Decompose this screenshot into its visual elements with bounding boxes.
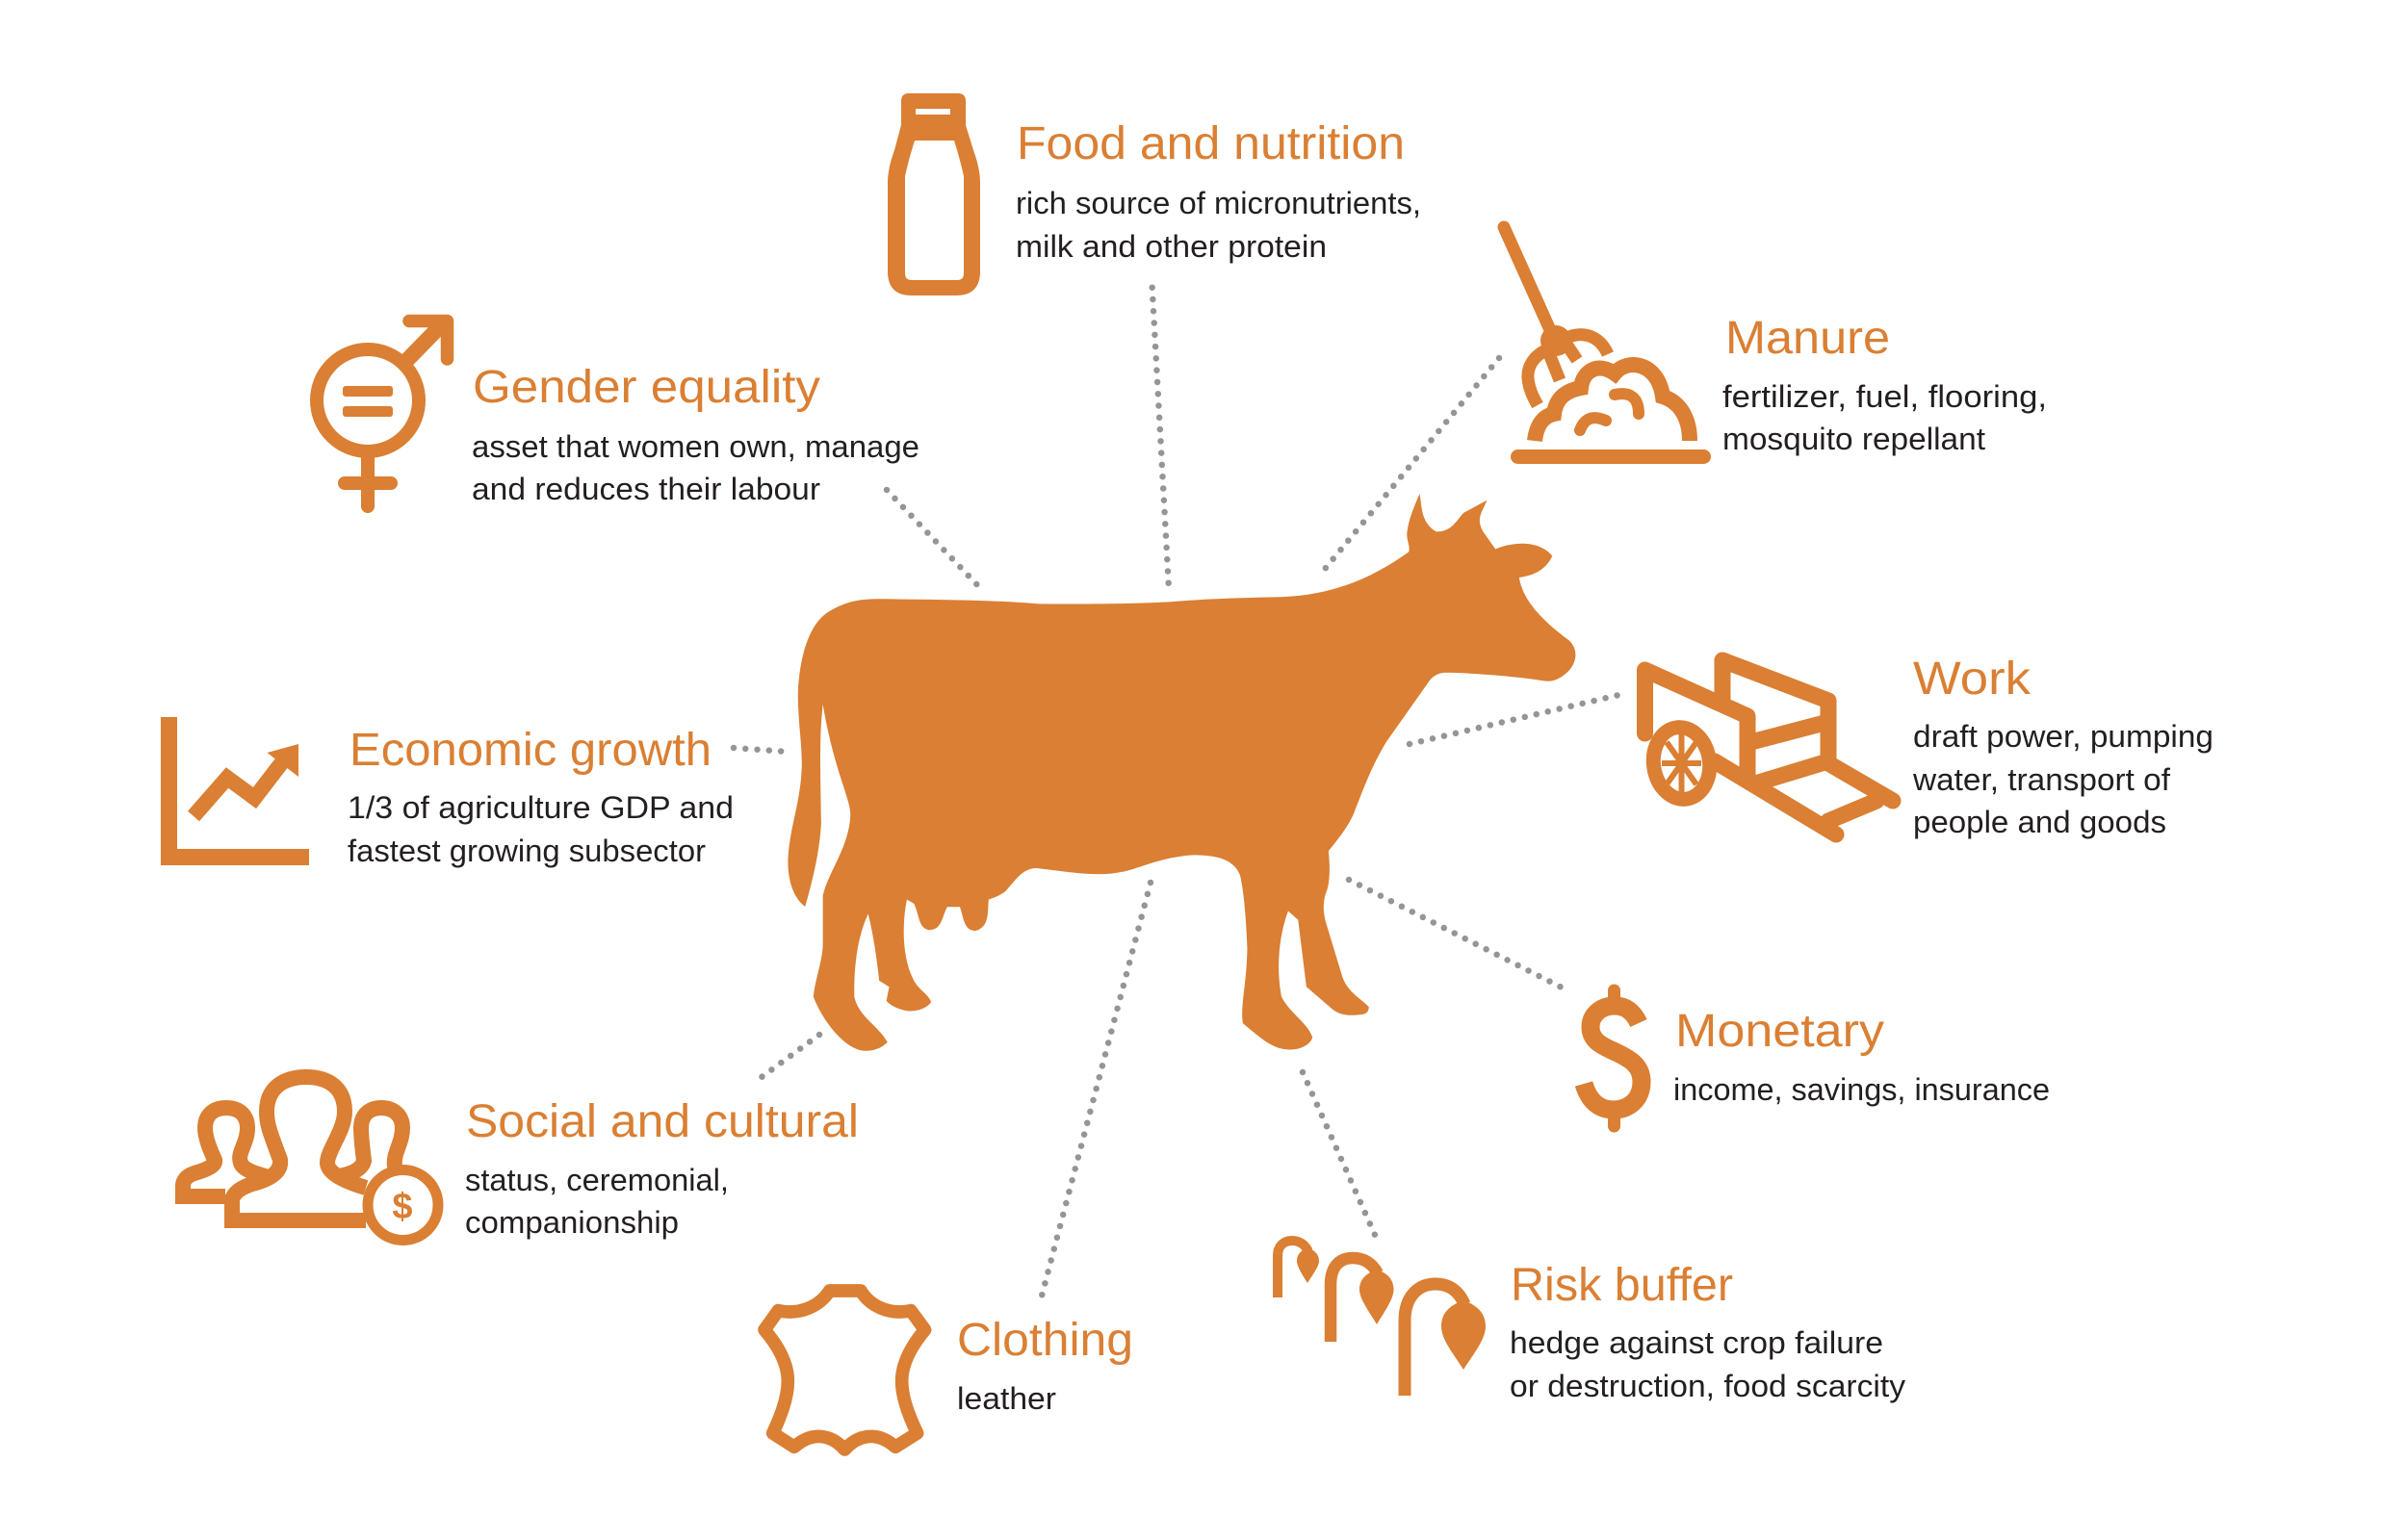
- panel: clothing: [764, 1291, 1133, 1450]
- heading: work: Work: [1913, 654, 2032, 705]
- icon: milk bottle: [888, 93, 980, 295]
- icon: pitchfork and manure pile: [1504, 227, 1711, 464]
- icon: leather hide: [764, 1291, 925, 1450]
- text: risk buffer description: hedge against crop failure: [1510, 1325, 1883, 1360]
- text: food and nutrition description: milk and other protein: [1016, 229, 1327, 264]
- heading: gender equality: Gender equality: [473, 362, 820, 413]
- panel: risk buffer: [1278, 1241, 1905, 1403]
- text: work description: people and goods: [1913, 805, 2166, 839]
- text: social and cultural description: companionship: [465, 1205, 679, 1240]
- icon: wilted plants: [1278, 1241, 1486, 1396]
- icon: people with coin: $: [392, 1187, 413, 1227]
- heading: food and nutrition: Food and nutrition: [1017, 118, 1405, 169]
- panel: monetary: [1584, 990, 2050, 1126]
- dotted connector lines: [734, 288, 1627, 1299]
- text: manure description: fertilizer, fuel, flooring,: [1722, 379, 2047, 414]
- heading: manure: Manure: [1725, 313, 1890, 364]
- icon: cart: [1644, 660, 1893, 834]
- panel: economic growth: [161, 717, 734, 868]
- icon: growth chart: [161, 717, 309, 865]
- text: clothing description: leather: [957, 1381, 1056, 1416]
- panel: gender equality: [317, 321, 919, 506]
- text: monetary description: income, savings, insurance: [1673, 1072, 2050, 1107]
- text: food and nutrition description: rich source of micronutrients,: [1016, 186, 1421, 220]
- text: manure description: mosquito repellant: [1722, 422, 1985, 456]
- text: social and cultural description: status, ceremonial,: [465, 1163, 729, 1197]
- text: work description: water, transport of: [1912, 762, 2170, 797]
- panel: work: [1644, 654, 2213, 839]
- icon: gender symbol: [317, 321, 447, 506]
- heading: clothing: Clothing: [957, 1315, 1133, 1366]
- heading: risk buffer: Risk buffer: [1511, 1260, 1733, 1311]
- panel: social and cultural: [183, 1077, 859, 1240]
- panel: manure: [1504, 227, 2047, 464]
- text: gender equality description: and reduces their labour: [472, 472, 820, 506]
- text: economic growth description: 1/3 of agriculture GDP and: [348, 790, 734, 825]
- cow silhouette: [788, 494, 1575, 1051]
- text: economic growth description: fastest growing subsector: [348, 834, 706, 868]
- heading: social and cultural: Social and cultural: [466, 1096, 859, 1147]
- text: work description: draft power, pumping: [1913, 719, 2213, 754]
- icon: dollar sign: [1584, 990, 1642, 1126]
- heading: monetary: Monetary: [1675, 1006, 1884, 1057]
- panel: food and nutrition: [888, 93, 1421, 295]
- heading: economic growth: Economic growth: [349, 725, 712, 776]
- text: gender equality description: asset that women own, manage: [472, 429, 919, 464]
- icon: people with coin: [183, 1077, 438, 1240]
- text: risk buffer description: or destruction, food scarcity: [1510, 1369, 1905, 1403]
